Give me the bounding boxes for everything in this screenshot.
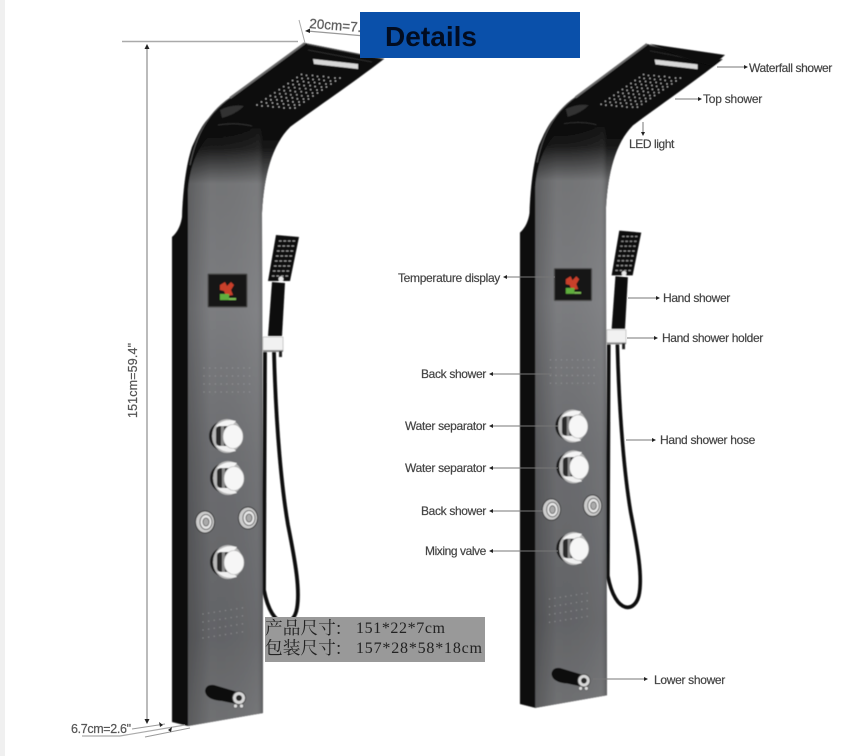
callout: LED light: LED light [629, 137, 675, 151]
size specification box [265, 615, 485, 662]
callout: LED light [629, 122, 675, 151]
package size text: 157*28*58*18cm [356, 640, 483, 657]
callout: back shower upper [421, 367, 552, 381]
callout: mixing valve: Mixing valve [425, 544, 487, 558]
callout: temperature display [398, 271, 555, 285]
product size text: 产品尺寸: [265, 615, 342, 640]
callout: back shower lower: Back shower [421, 504, 486, 518]
callout: lower shower: Lower shower [654, 673, 725, 687]
dimension: width 20cm: 20cm=7.9" [309, 16, 374, 36]
left margin strip [0, 0, 5, 756]
dimension: height 151cm [122, 42, 298, 724]
callout: water separator upper: Water separator [405, 419, 486, 433]
dimension: depth 6.7cm: 6.7cm=2.6" [71, 722, 131, 736]
dimension: depth 6.7cm [71, 722, 190, 737]
heading text: Details [385, 21, 477, 52]
callout: top shower: Top shower [703, 92, 762, 106]
callout: hand shower hose: Hand shower hose [660, 433, 756, 447]
product size text [265, 615, 446, 640]
callout: hand shower holder: Hand shower holder [662, 331, 763, 345]
package size text [265, 635, 483, 660]
callout: hand shower [628, 291, 730, 305]
callout: top shower [675, 92, 762, 106]
shower head tip of labelled panel [650, 44, 725, 66]
callout: temperature display: Temperature display [398, 271, 500, 285]
callout: waterfall shower: Waterfall shower [749, 61, 832, 75]
callout: mixing valve [425, 544, 558, 558]
dimension: height 151cm: 151cm=59.4" [126, 343, 140, 418]
callout: water separator upper [405, 419, 558, 433]
callout: hand shower: Hand shower [663, 291, 730, 305]
callout: water separator lower [405, 461, 558, 475]
package size text: 包装尺寸: [265, 635, 342, 660]
product size text: 151*22*7cm [356, 620, 446, 637]
callout: water separator lower: Water separator [405, 461, 486, 475]
product illustration: dimensioned panel [172, 43, 384, 726]
callout: lower shower [593, 673, 725, 687]
callout: back shower upper: Back shower [421, 367, 486, 381]
heading banner [360, 12, 580, 58]
dimension: width 20cm [299, 16, 374, 43]
product illustration: labelled panel [520, 44, 722, 708]
callout: back shower lower [421, 504, 543, 518]
